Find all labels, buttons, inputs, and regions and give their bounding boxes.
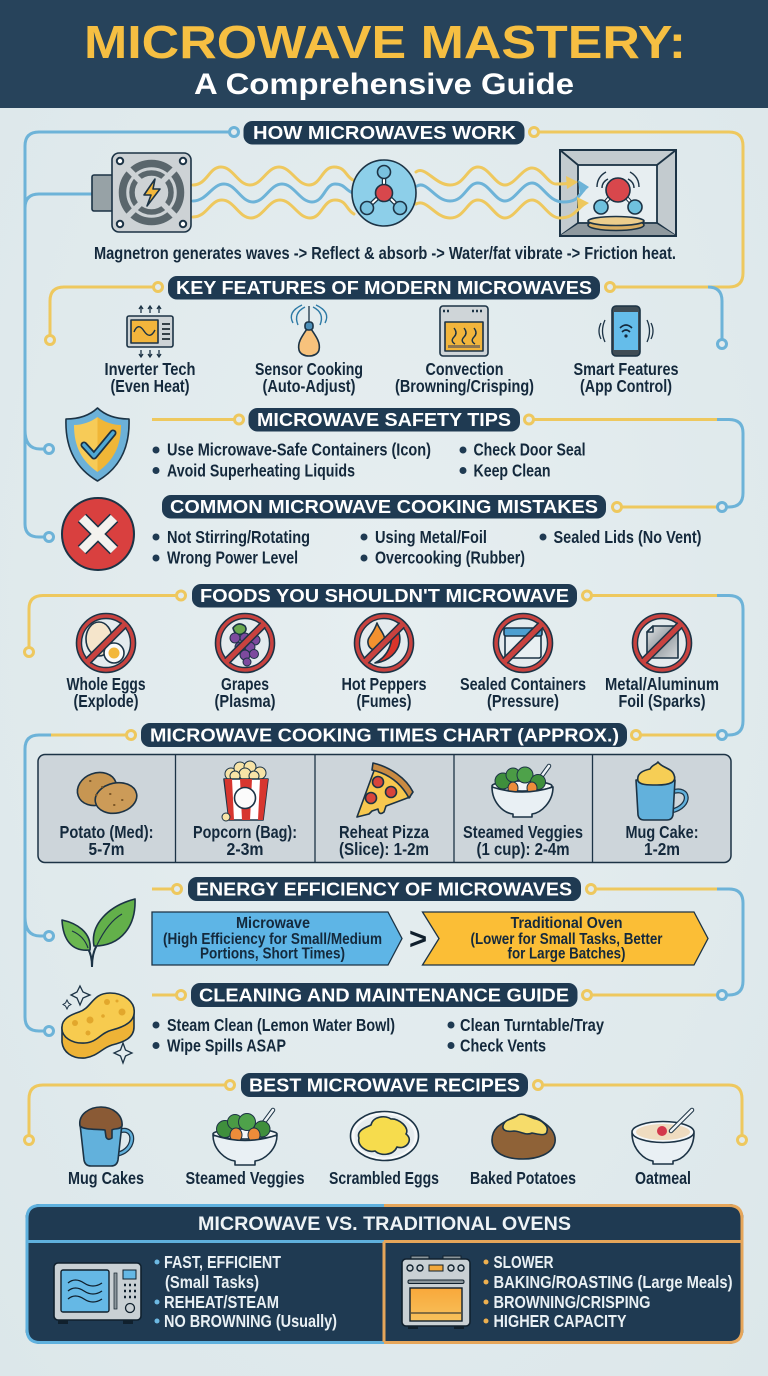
icon: mug cake — [636, 762, 686, 820]
icon: no sealed container — [494, 614, 552, 672]
list: oven points — [484, 1252, 732, 1331]
list: microwave points: NO BROWNING (Usually) — [164, 1311, 337, 1331]
feature: smart features: (App Control) — [580, 376, 672, 396]
safety tips list: Keep Clean — [474, 460, 550, 480]
cleaning list: Clean Turntable/Tray — [460, 1015, 604, 1035]
icon: water molecule in circle — [352, 160, 416, 226]
waves diagram — [92, 150, 676, 236]
chart cell: steamed veggies: Steamed Veggies — [463, 822, 583, 842]
comparison arrow: traditional oven: Traditional Oven — [510, 915, 622, 932]
icon: oven — [402, 1256, 470, 1329]
comparison arrow: traditional oven — [422, 912, 708, 965]
feature: convection: Convection — [426, 359, 504, 379]
cleaning list: Wipe Spills ASAP — [167, 1036, 286, 1056]
food: grapes: (Plasma) — [214, 691, 276, 711]
safety tips list: Avoid Superheating Liquids — [167, 460, 355, 480]
heading: key features: KEY FEATURES OF MODERN MICROWAVES — [176, 277, 592, 298]
food: hot peppers — [342, 614, 427, 711]
icon: popcorn — [222, 761, 268, 821]
icon: safety shield — [66, 408, 129, 481]
feature: inverter tech: Inverter Tech — [104, 359, 196, 379]
safety tips list — [152, 440, 586, 480]
chart cell: steamed veggies — [463, 766, 583, 859]
mistakes list: Sealed Lids (No Vent) — [554, 527, 702, 547]
safety tips list: Check Door Seal — [474, 440, 586, 460]
food: hot peppers: Hot Peppers — [342, 674, 427, 694]
food: metal foil: Metal/Aluminum — [605, 674, 719, 694]
food: hot peppers: (Fumes) — [356, 691, 412, 711]
subtitle: A Comprehensive Guide — [194, 68, 574, 101]
icon: plate of eggs — [350, 1112, 418, 1160]
mistakes list: Wrong Power Level — [167, 548, 298, 568]
heading: foods to avoid: FOODS YOU SHOULDN'T MICROWAVE — [200, 585, 569, 606]
icon: no peppers — [354, 614, 414, 672]
heading: cooking mistakes: COMMON MICROWAVE COOKING MISTAKES — [170, 496, 598, 517]
header banner — [0, 0, 768, 108]
recipe: steamed veggies — [186, 1110, 305, 1188]
comparison arrow: microwave: (High Efficiency for Small/Medium — [163, 931, 382, 948]
comparison arrow: traditional oven: for Large Batches) — [508, 946, 626, 962]
panel: microwave vs traditional ovens — [26, 1204, 744, 1344]
recipe: oatmeal: Oatmeal — [635, 1168, 691, 1188]
cooking times chart — [38, 754, 731, 862]
icon: no eggs — [76, 614, 136, 672]
comparison arrow: microwave: Microwave — [236, 915, 310, 932]
mistakes list: Not Stirring/Rotating — [167, 527, 310, 547]
feature: convection — [395, 306, 534, 396]
feature: inverter tech: (Even Heat) — [110, 376, 190, 396]
icon: no grapes — [216, 614, 274, 672]
recipe: steamed veggies: Steamed Veggies — [186, 1168, 305, 1188]
icon: baked potato — [492, 1114, 555, 1159]
icon: veggie bowl — [213, 1110, 277, 1165]
recipe: scrambled eggs: Scrambled Eggs — [329, 1168, 439, 1188]
comparison arrow: microwave — [152, 912, 402, 965]
comparison arrow: traditional oven: (Lower for Small Tasks, Better — [470, 931, 662, 948]
panel title: MICROWAVE VS. TRADITIONAL OVENS — [198, 1213, 571, 1235]
chart cell: pizza: (Slice): 1-2m — [339, 839, 429, 859]
icon: microwave — [54, 1263, 141, 1324]
feature: convection: (Browning/Crisping) — [395, 376, 534, 396]
recipe: baked potatoes: Baked Potatoes — [470, 1168, 576, 1188]
food: whole eggs: (Explode) — [74, 691, 138, 711]
cleaning list: Check Vents — [460, 1036, 546, 1056]
list: microwave points: (Small Tasks) — [165, 1272, 259, 1292]
feature: sensor cooking — [255, 305, 363, 396]
food: whole eggs: Whole Eggs — [66, 674, 146, 694]
mistakes list: Using Metal/Foil — [375, 527, 487, 547]
icon: no foil — [632, 614, 692, 672]
icon: microwave cavity — [560, 150, 676, 236]
connector lines — [24, 128, 746, 1144]
food: sealed containers: Sealed Containers — [460, 674, 586, 694]
icon: leaves — [62, 899, 135, 967]
heading: safety tips: MICROWAVE SAFETY TIPS — [257, 409, 511, 430]
feature: smart features: Smart Features — [574, 359, 679, 379]
comparison arrow: microwave: Portions, Short Times) — [200, 946, 345, 962]
chart cell: popcorn: 2-3m — [226, 839, 264, 859]
icon: red x — [62, 498, 134, 570]
list: oven points: HIGHER CAPACITY — [494, 1311, 627, 1331]
list: microwave points: FAST, EFFICIENT — [164, 1252, 281, 1272]
chart cell: steamed veggies: (1 cup): 2-4m — [476, 839, 570, 859]
chart cell: potato: Potato (Med): — [60, 822, 154, 842]
icon: potatoes — [73, 767, 140, 817]
icon: mug cake with chocolate — [80, 1107, 132, 1166]
heading: energy efficiency: ENERGY EFFICIENCY OF MICROWAVES — [196, 878, 572, 900]
heading: cooking times: MICROWAVE COOKING TIMES CHART (APPROX.) — [150, 724, 619, 746]
food: grapes: Grapes — [221, 674, 269, 694]
cleaning list: Steam Clean (Lemon Water Bowl) — [167, 1015, 395, 1035]
icon: oatmeal bowl — [632, 1110, 694, 1164]
food: metal foil: Foil (Sparks) — [618, 691, 706, 711]
feature: smart features — [574, 306, 679, 396]
icon: sponge with sparkles — [62, 986, 134, 1063]
list: oven points: SLOWER — [494, 1252, 554, 1272]
chart cell: popcorn: Popcorn (Bag): — [193, 822, 297, 842]
feature: inverter tech — [104, 306, 196, 396]
safety tips list: Use Microwave-Safe Containers (Icon) — [167, 440, 431, 460]
feature: sensor cooking: Sensor Cooking — [255, 359, 363, 379]
cleaning list — [152, 1015, 604, 1056]
list: oven points: BROWNING/CRISPING — [494, 1292, 650, 1312]
feature: sensor cooking: (Auto-Adjust) — [262, 376, 356, 396]
mistakes list: Overcooking (Rubber) — [375, 548, 525, 568]
food: metal foil — [605, 614, 719, 711]
icon: inverter microwave — [127, 306, 173, 357]
recipe: mug cakes: Mug Cakes — [68, 1168, 144, 1188]
food: sealed containers: (Pressure) — [487, 691, 559, 711]
title: MICROWAVE MASTERY: — [84, 16, 686, 68]
chart cell: popcorn — [193, 761, 297, 859]
mistakes list — [152, 527, 702, 568]
chart cell: potato: 5-7m — [88, 839, 124, 859]
recipe: oatmeal — [632, 1110, 694, 1188]
chart cell: mug cake: 1-2m — [644, 839, 680, 859]
list: microwave points: REHEAT/STEAM — [164, 1292, 279, 1312]
icon: convection oven — [440, 306, 488, 356]
heading: cleaning guide: CLEANING AND MAINTENANCE GUIDE — [199, 984, 569, 1006]
recipe: mug cakes — [68, 1107, 144, 1188]
recipe: baked potatoes — [470, 1114, 576, 1188]
food: grapes — [214, 614, 276, 711]
icon: veggie bowl — [492, 766, 553, 817]
food: whole eggs — [66, 614, 146, 711]
food: sealed containers — [460, 614, 586, 711]
icon: smartphone wifi — [599, 306, 653, 356]
recipe: scrambled eggs — [329, 1112, 439, 1188]
greater than symbol: > — [409, 921, 427, 956]
chart cell: mug cake — [626, 762, 698, 859]
icon: pizza slice — [357, 763, 413, 817]
heading: best recipes: BEST MICROWAVE RECIPES — [249, 1074, 520, 1096]
icon: magnetron — [92, 153, 191, 232]
chart cell: potato — [60, 767, 154, 859]
chart cell: pizza — [339, 763, 429, 859]
waves right — [416, 167, 589, 218]
chart cell: mug cake: Mug Cake: — [626, 822, 698, 842]
list: microwave points — [154, 1252, 337, 1331]
waves left — [193, 167, 354, 218]
heading: how microwaves work: HOW MICROWAVES WORK — [253, 122, 517, 143]
chart cell: pizza: Reheat Pizza — [339, 822, 429, 842]
icon: sensor finger — [291, 305, 327, 356]
